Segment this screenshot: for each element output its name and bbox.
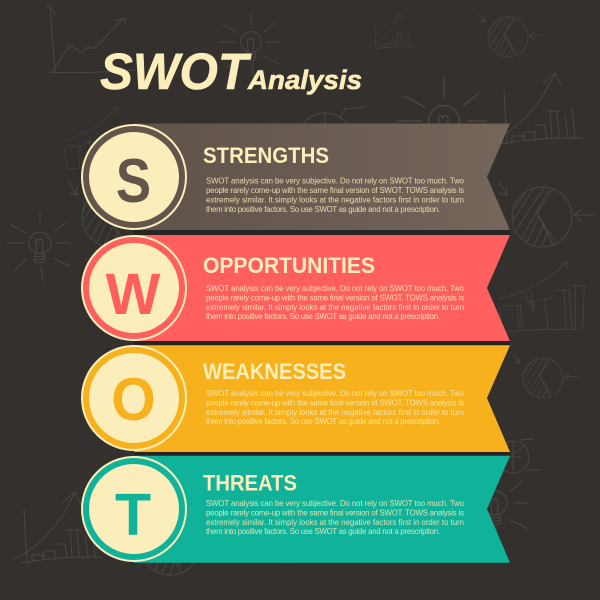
badge: W: [81, 235, 187, 341]
text: opportunities description: them into positive factors. So use SWOT as guide and not a prescription.: [206, 312, 440, 321]
badge: S: S: [116, 147, 151, 216]
text: threats description: SWOT analysis can be very subjective. Do not rely on SWOT too much. Two: [206, 499, 465, 508]
panel: threats: [81, 456, 510, 563]
ribbon: opportunities: [134, 235, 510, 346]
badge: O: O: [111, 367, 156, 433]
text: opportunities description: people rarely come-up with the same final version of SWOT. TOWS analysis is: [206, 294, 464, 302]
text: opportunities description: [206, 284, 465, 321]
text: weaknesses description: extremely similar. It simply looks at the negative factors first in order to turn: [206, 408, 464, 417]
doodle: line chart top left: [46, 5, 135, 73]
badge: T: T: [115, 482, 151, 548]
text: strengths description: extremely similar. It simply looks at the negative factors first in order to turn: [206, 196, 464, 204]
panel: strengths: [81, 124, 510, 235]
text: weaknesses description: [206, 389, 465, 426]
text: threats description: extremely similar. It simply looks at the negative factors first in order to turn: [206, 518, 464, 527]
text: weaknesses description: SWOT analysis can be very subjective. Do not rely on SWOT too much. Two: [206, 389, 465, 398]
title: SWOT: [100, 43, 252, 100]
text: threats description: them into positive factors. So use SWOT as guide and not a prescription.: [206, 527, 440, 536]
ribbon: weaknesses: [134, 345, 510, 456]
text: threats description: people rarely come-up with the same final version of SWOT. TOWS analysis is: [206, 508, 464, 518]
title: Analysis: [247, 65, 362, 95]
text: strengths description: them into positive factors. So use SWOT as guide and not a prescription.: [206, 205, 440, 214]
text: strengths description: SWOT analysis can be very subjective. Do not rely on SWOT too much. Two: [206, 176, 465, 186]
title: [100, 43, 362, 100]
text: weaknesses description: people rarely come-up with the same final version of SWOT. TOWS analysis is: [206, 398, 464, 408]
panel: opportunities: [81, 235, 510, 346]
text: opportunities description: extremely similar. It simply looks at the negative factors first in order to turn: [206, 303, 464, 312]
heading: strengths: STRENGTHS: [203, 143, 329, 168]
text: threats description: [206, 499, 465, 536]
text: strengths description: people rarely come-up with the same final version of SWOT. TOWS analysis is: [206, 186, 464, 195]
ribbon: threats: [134, 456, 510, 563]
badge: S: [81, 124, 187, 230]
doodle: circle with lines: [268, 107, 540, 564]
heading: opportunities: OPPORTUNITIES: [203, 253, 375, 278]
text: weaknesses description: them into positive factors. So use SWOT as guide and not a prescription.: [206, 417, 440, 426]
heading: weaknesses: WEAKNESSES: [203, 359, 346, 384]
panel: weaknesses: [81, 345, 510, 456]
text: opportunities description: SWOT analysis can be very subjective. Do not rely on SWOT too much. Two: [206, 284, 465, 293]
text: strengths description: [206, 176, 465, 214]
badge: W: W: [106, 262, 161, 327]
heading: threats: THREATS: [203, 470, 297, 496]
badge: O: [81, 345, 187, 451]
badge: T: [81, 456, 187, 562]
ribbon: strengths: [134, 124, 510, 235]
